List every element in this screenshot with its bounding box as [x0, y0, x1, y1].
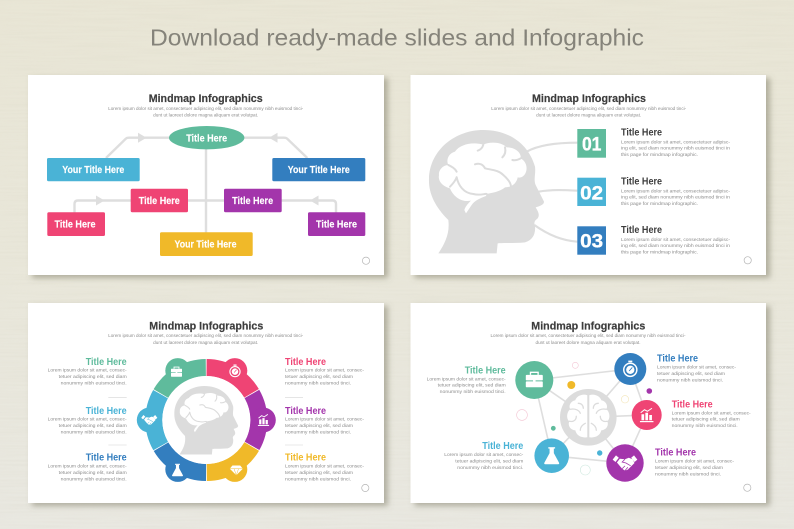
text: blue: tetuer adipiscing elit, sed diam — [657, 371, 725, 377]
right text: purple — [285, 406, 364, 436]
connector lines and arrows — [74, 133, 336, 233]
node: pink box left — [47, 212, 105, 236]
text: pink: Title Here — [672, 399, 713, 410]
item 01: 01 — [582, 134, 602, 156]
text: teal: Lorem ipsum dolor sit amet, consec- — [427, 376, 506, 382]
slide subtitle: dunt ut laoreet dolore magna aliquam erat volutpat. — [536, 112, 641, 117]
item 02 — [577, 177, 730, 207]
slide subtitle — [108, 333, 304, 345]
node: pink box center: Title Here — [139, 196, 180, 207]
page badge — [744, 484, 751, 491]
panel: flow mindmap slide — [28, 75, 384, 275]
text: pink — [672, 399, 751, 429]
node: top ellipse: Title Here — [186, 133, 228, 144]
left text: blue: nonummy nibh euismod tinci. — [61, 476, 127, 482]
node: dark blue box: Your Title Here — [288, 165, 350, 176]
right text: pink: nonummy nibh euismod tinci. — [285, 380, 351, 386]
page badge — [744, 257, 751, 264]
slide title: Mindmap Infographics — [531, 321, 645, 333]
left text: blue: Title Here — [86, 453, 127, 464]
text: teal: tetuer adipiscing elit, sed diam — [438, 382, 506, 388]
right text: pink: Lorem ipsum dolor sit amet, consec- — [285, 368, 364, 374]
page badge — [362, 484, 369, 492]
item 03: this page for mindmap infographic. — [621, 250, 698, 256]
node: purple box right — [308, 212, 365, 236]
slide subtitle: Lorem ipsum dolor sit amet, consectetuer adipiscing elit, sed diam nonummy nibh euismod tinci- — [108, 106, 304, 111]
text: purple: Lorem ipsum dolor sit amet, consec- — [655, 459, 734, 465]
item 01: Lorem ipsum dolor sit amet, consectetuer adipisc- — [621, 139, 730, 145]
right text: pink: Title Here — [285, 357, 326, 368]
ring segment: purple chart — [135, 348, 278, 492]
left text: blue — [48, 453, 127, 482]
connector curves — [527, 143, 577, 242]
slide background — [28, 303, 384, 503]
right text: pink — [285, 357, 364, 386]
node: top ellipse — [169, 126, 244, 149]
node: light blue box: Your Title Here — [62, 165, 125, 176]
slide subtitle — [108, 106, 304, 117]
text: blue — [657, 354, 736, 384]
panel: ring slide — [28, 303, 384, 503]
right text: pink: tetuer adipiscing elit, sed diam — [285, 374, 353, 380]
node: yellow box: Your Title Here — [174, 240, 237, 251]
text: blue: Title Here — [657, 354, 698, 365]
slide subtitle: dunt ut laoreet dolore magna aliquam erat volutpat. — [536, 340, 640, 345]
item 01 — [577, 128, 730, 158]
central brain — [560, 389, 617, 446]
item 01: Title Here — [621, 128, 662, 139]
right text: purple: Lorem ipsum dolor sit amet, consec- — [285, 417, 364, 423]
text: purple: Title Here — [655, 448, 696, 459]
text: pink: tetuer adipiscing elit, sed diam — [672, 417, 740, 423]
node: pink box left: Title Here — [54, 220, 96, 230]
text: teal — [427, 365, 506, 395]
left text: cyan: Title Here — [86, 406, 127, 417]
decorative dots and rings — [517, 362, 652, 475]
slide subtitle: dunt ut laoreet dolore magna aliquam erat volutpat. — [153, 340, 258, 345]
slide subtitle: Lorem ipsum dolor sit amet, consectetuer adipiscing elit, sed diam nonummy nibh euismod tinci- — [491, 106, 687, 111]
panel: numbered head slide — [410, 75, 766, 275]
left text: cyan: tetuer adipiscing elit, sed diam — [59, 423, 127, 429]
right text: purple: Title Here — [285, 406, 326, 417]
node: purple handshake — [606, 444, 644, 482]
left text: blue: tetuer adipiscing elit, sed diam — [59, 470, 127, 476]
text: pink: nonummy nibh euismod tinci. — [672, 423, 738, 429]
slide background — [28, 75, 384, 275]
slide subtitle: Lorem ipsum dolor sit amet, consectetuer adipiscing elit, sed diam nonummy nibh euismod tinci- — [490, 333, 686, 338]
right text: purple: tetuer adipiscing elit, sed diam — [285, 423, 353, 429]
slide background — [410, 303, 766, 503]
text: teal: nonummy nibh euismod tinci. — [440, 389, 506, 395]
item 03: Title Here — [621, 225, 662, 236]
text: cyan: tetuer adipiscing elit, sed diam — [455, 458, 523, 464]
text: blue: nonummy nibh euismod tinci. — [657, 378, 723, 384]
item 02: 02 — [580, 183, 603, 204]
left text: cyan — [48, 406, 127, 436]
text: purple: nonummy nibh euismod tinci. — [655, 472, 721, 478]
ring segment: teal briefcase — [134, 348, 278, 492]
item 02: this page for mindmap infographic. — [621, 201, 698, 207]
ring segment: cyan handshake — [135, 348, 278, 492]
left text: cyan: nonummy nibh euismod tinci. — [61, 430, 127, 436]
slide title: Mindmap Infographics — [149, 321, 263, 333]
node: light blue box — [47, 158, 140, 181]
item 03: Lorem ipsum dolor sit amet, consectetuer adipisc- — [621, 237, 730, 243]
right text: yellow: Title Here — [285, 453, 326, 464]
text: blue: Lorem ipsum dolor sit amet, consec- — [657, 365, 736, 371]
node: blue stopwatch — [614, 353, 646, 385]
slide background — [410, 75, 766, 275]
item 02: ing elit, sed diam nonummy nibh euismod tinci in — [621, 194, 730, 200]
node: yellow box — [160, 232, 253, 256]
left text: teal: Title Here — [86, 357, 127, 368]
item 01: this page for mindmap infographic. — [621, 152, 698, 158]
text: purple: tetuer adipiscing elit, sed diam — [655, 465, 723, 471]
ring segment: yellow gem — [134, 348, 278, 492]
slide subtitle — [490, 333, 686, 345]
slide title: Mindmap Infographics — [532, 93, 646, 105]
node: purple box center: Title Here — [232, 196, 273, 207]
text: cyan: Title Here — [482, 441, 524, 452]
page badge — [362, 257, 370, 264]
text: purple — [655, 448, 734, 478]
right text: yellow: tetuer adipiscing elit, sed diam — [285, 470, 353, 476]
item 02: Title Here — [621, 177, 662, 188]
right text: yellow: nonummy nibh euismod tinci. — [285, 476, 351, 482]
right text: yellow — [285, 453, 364, 482]
icon: head in ring — [174, 386, 238, 454]
item 03: 03 — [580, 232, 603, 253]
item 03: ing elit, sed diam nonummy nibh euismod tinci in — [621, 243, 730, 249]
text: cyan: nonummy nibh euismod tinci. — [457, 465, 523, 471]
right text: purple: nonummy nibh euismod tinci. — [285, 430, 351, 436]
node: purple box right: Title Here — [316, 220, 357, 230]
ring segment: pink stopwatch — [153, 358, 259, 473]
main heading: Download ready-made slides and Infographic — [150, 25, 644, 51]
slide subtitle: Lorem ipsum dolor sit amet, consectetuer adipiscing elit, sed diam nonummy nibh euismod tinci- — [108, 333, 304, 338]
inner white disc — [162, 376, 250, 464]
left text: blue: Lorem ipsum dolor sit amet, consec- — [48, 463, 127, 469]
node: dark blue box — [272, 158, 365, 181]
ring segment: blue flask — [153, 367, 259, 482]
item 03 — [577, 225, 730, 256]
item 02: Lorem ipsum dolor sit amet, consectetuer adipisc- — [621, 188, 730, 194]
node: teal briefcase — [515, 361, 553, 399]
slide subtitle — [491, 106, 687, 117]
text: cyan — [444, 441, 524, 471]
node: pink chart — [632, 400, 662, 430]
node: cyan flask — [534, 438, 569, 473]
left text: cyan: Lorem ipsum dolor sit amet, consec- — [48, 417, 127, 423]
slide subtitle: dunt ut laoreet dolore magna aliquam erat volutpat. — [153, 112, 258, 117]
left text: teal — [48, 357, 127, 386]
text: teal: Title Here — [465, 365, 506, 376]
left text: teal: tetuer adipiscing elit, sed diam — [59, 374, 127, 380]
text: cyan: Lorem ipsum dolor sit amet, consec- — [444, 452, 524, 458]
node: purple box center — [224, 189, 282, 212]
node: pink box center — [131, 189, 188, 212]
right text: yellow: Lorem ipsum dolor sit amet, consec- — [285, 463, 364, 469]
network lines — [534, 369, 647, 463]
left text: teal: Lorem ipsum dolor sit amet, consec- — [48, 368, 127, 374]
slide title: Mindmap Infographics — [149, 93, 263, 105]
left text: teal: nonummy nibh euismod tinci. — [61, 380, 127, 386]
icon: head with brain — [429, 130, 544, 253]
panel: network slide — [410, 303, 766, 503]
text: pink: Lorem ipsum dolor sit amet, consec- — [672, 410, 751, 416]
item 01: ing elit, sed diam nonummy nibh euismod tinci in — [621, 146, 730, 152]
